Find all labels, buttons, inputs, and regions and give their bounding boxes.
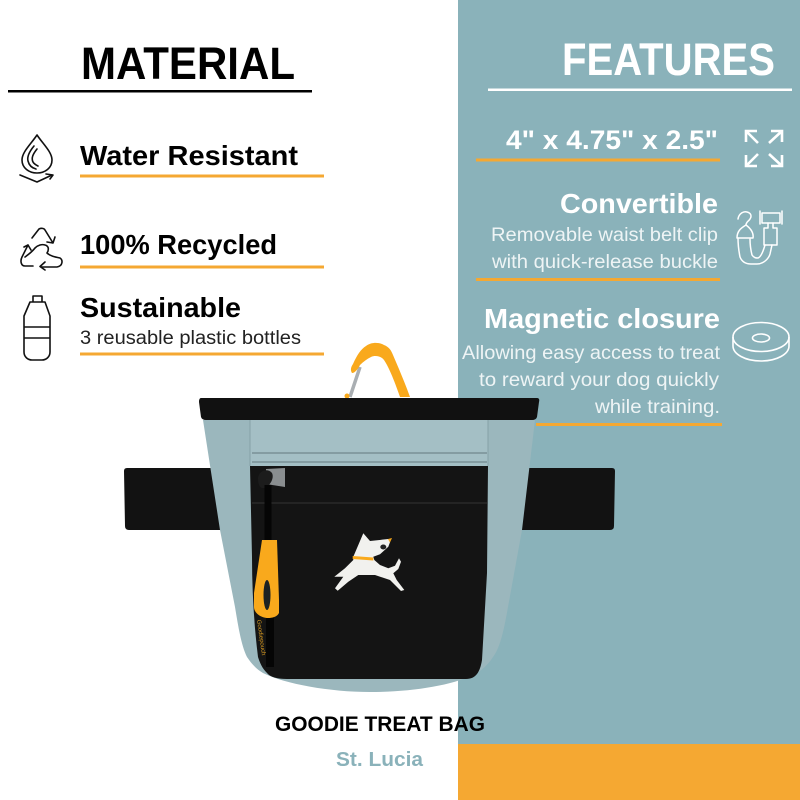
text block: dimensions: 4" x 4.75" x 2.5"	[506, 125, 718, 155]
text block: water resistant: Water Resistant	[80, 140, 298, 171]
text block: dimensions	[476, 125, 720, 162]
text block: magnetic closure: Allowing easy access to treat	[462, 342, 721, 364]
text block: 100% recycled: 100% Recycled	[80, 229, 277, 260]
panel: material	[8, 38, 324, 360]
zipper pull	[254, 468, 285, 667]
icon: water drop	[20, 135, 53, 182]
text block: sustainable: Sustainable	[80, 292, 241, 323]
waist belt	[124, 468, 615, 530]
icon: expand arrows	[746, 131, 782, 166]
icon: bottle	[24, 296, 50, 360]
caption: product name: GOODIE TREAT BAG	[275, 713, 485, 736]
icon: magnet disc	[733, 322, 789, 361]
text block: convertible: Removable waist belt clip	[491, 224, 718, 246]
text block: convertible: with quick-release buckle	[491, 251, 718, 273]
bag upper panel	[250, 420, 488, 466]
bag rim	[199, 398, 539, 420]
product photo: treat bag	[124, 343, 615, 692]
zipper band	[252, 502, 487, 504]
panel: features	[462, 34, 792, 426]
black front pocket	[250, 466, 488, 679]
carabiner	[344, 343, 410, 398]
brand text on pull tail: Goodiepouch	[255, 619, 266, 656]
text block: magnetic closure: Magnetic closure	[484, 303, 720, 334]
text block: sustainable: 3 reusable plastic bottles	[80, 328, 301, 349]
text block: magnetic closure: while training.	[594, 396, 720, 418]
panel stitching	[250, 420, 488, 466]
panel: orange footer block	[458, 744, 800, 800]
text block: convertible: Convertible	[560, 188, 718, 219]
icon: belt clip	[737, 211, 782, 264]
text block: 100% recycled	[80, 229, 324, 268]
text block: convertible	[476, 188, 720, 281]
caption: colourway: St. Lucia	[336, 749, 424, 771]
text block: magnetic closure: to reward your dog quickly	[479, 369, 719, 391]
icon: recycle	[21, 228, 62, 270]
bag body	[203, 420, 535, 692]
heading: material: MATERIAL	[81, 38, 295, 89]
heading: features: FEATURES	[562, 34, 775, 85]
panel: features background	[458, 0, 800, 744]
text block: sustainable	[80, 292, 324, 356]
text block: magnetic closure	[462, 303, 722, 426]
dog logo	[334, 533, 404, 591]
